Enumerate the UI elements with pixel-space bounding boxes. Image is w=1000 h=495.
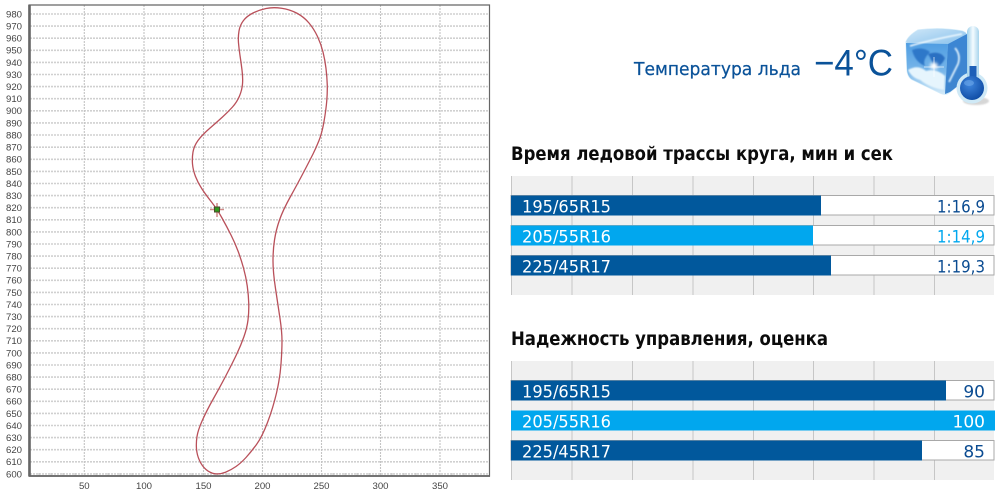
bar: 195/65R15: 90 (963, 382, 985, 402)
y axis labels: 850 (6, 167, 22, 178)
y axis labels: 930 (6, 70, 22, 81)
track map chart (6, 5, 490, 492)
bar: 195/65R15: 195/65R15 (522, 197, 611, 217)
y axis labels: 920 (6, 82, 22, 93)
bar: 225/45R17 (511, 440, 994, 462)
y axis labels: 800 (6, 227, 22, 238)
x axis labels: 150 (195, 481, 212, 492)
y axis labels: 750 (6, 288, 22, 299)
value: minus four degrees: −4°C (814, 42, 893, 84)
y axis labels: 720 (6, 324, 22, 335)
x axis labels: 50 (79, 481, 90, 492)
y axis labels: 780 (6, 252, 22, 262)
bar: 205/55R16: 1:14,9 (937, 227, 985, 247)
y axis labels: 740 (6, 300, 22, 311)
heading: lap time: Время ледовой трассы круга, мин и сек (511, 144, 894, 165)
x axis labels: 200 (254, 481, 271, 492)
bar: 205/55R16: 100 (953, 412, 985, 432)
bar: 205/55R16: 205/55R16 (522, 412, 611, 432)
y axis labels: 840 (6, 179, 22, 190)
y axis labels: 960 (6, 34, 22, 45)
x axis labels: 100 (136, 481, 152, 492)
y axis labels: 670 (6, 385, 22, 396)
bar: 205/55R16 (511, 226, 994, 247)
icon: ice cube with thermometer (906, 26, 989, 105)
bar: 205/55R16 (511, 410, 995, 432)
temperature heading (633, 42, 893, 84)
y axis labels: 880 (6, 130, 22, 141)
y axis labels: 660 (6, 397, 22, 408)
y axis labels: 910 (6, 94, 22, 105)
bar: 225/45R17: 225/45R17 (522, 257, 611, 277)
bar: 205/55R16: 205/55R16 (522, 227, 611, 247)
chart background (511, 361, 994, 480)
y axis labels: 680 (6, 372, 22, 384)
chart background (511, 176, 994, 295)
y axis labels: 620 (6, 445, 22, 456)
y axis labels: 650 (6, 409, 22, 420)
bar: 225/45R17: 85 (963, 442, 985, 462)
bar: 195/65R15 (511, 196, 994, 217)
y axis labels: 900 (6, 106, 22, 117)
label: ice temperature: Температура льда (633, 59, 801, 80)
x axis labels: 300 (372, 481, 389, 492)
start marker (210, 203, 224, 217)
y axis labels: 610 (6, 457, 22, 468)
bar: 195/65R15 (511, 380, 994, 402)
bar: 225/45R17 (511, 256, 994, 277)
bar: 225/45R17: 225/45R17 (522, 442, 611, 462)
panel: handling reliability (511, 329, 995, 480)
x axis labels: 250 (313, 481, 330, 492)
y axis labels: 790 (6, 239, 22, 250)
panel: ice lap time (511, 144, 994, 295)
y axis labels: 950 (6, 46, 22, 57)
y axis labels: 830 (6, 191, 22, 202)
y axis labels: 640 (6, 421, 22, 432)
y axis labels: 940 (6, 58, 22, 69)
track outline (192, 8, 327, 474)
y axis labels: 890 (6, 118, 22, 129)
thermometer (956, 26, 989, 105)
y axis labels: 690 (6, 360, 22, 371)
y axis labels: 700 (6, 348, 22, 359)
heading: handling score: Надежность управления, оценка (511, 329, 828, 350)
y axis labels: 810 (6, 215, 22, 226)
y axis labels: 730 (6, 312, 22, 323)
x axis labels: 350 (432, 481, 448, 492)
y axis labels: 870 (6, 143, 22, 154)
y axis labels: 970 (6, 22, 22, 32)
y axis labels: 820 (6, 203, 22, 214)
y axis labels: 710 (6, 336, 22, 347)
y axis labels: 980 (6, 9, 22, 20)
bar: 195/65R15: 195/65R15 (522, 382, 611, 402)
y axis labels (6, 9, 22, 480)
x axis labels (79, 481, 448, 492)
y axis labels: 760 (6, 276, 22, 287)
y axis labels: 770 (6, 264, 22, 275)
bar: 195/65R15: 1:16,9 (937, 197, 985, 217)
y axis labels: 630 (6, 433, 22, 444)
y axis labels: 600 (6, 469, 22, 480)
bar: 225/45R17: 1:19,3 (937, 257, 985, 277)
y axis labels: 860 (6, 155, 22, 166)
